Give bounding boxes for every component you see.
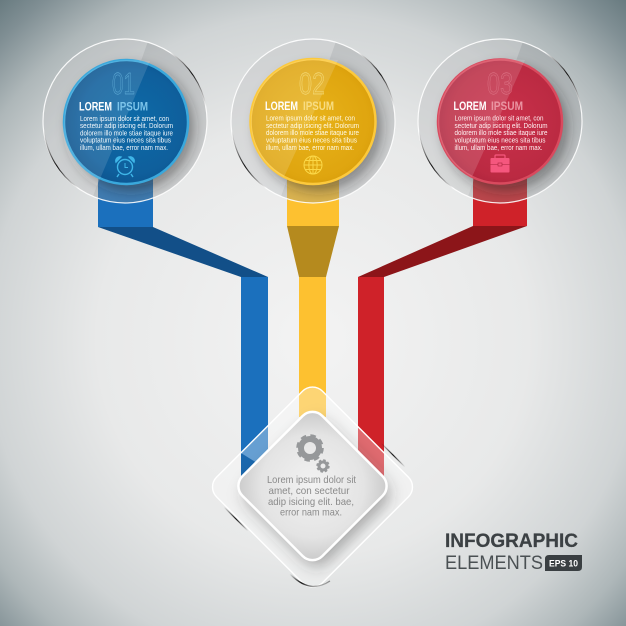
- panel: red circle: IPSUM: [491, 101, 523, 113]
- body text: dolorem illo mole stiae itaque iure: [454, 130, 548, 137]
- panel: blue circle: IPSUM: [117, 102, 148, 114]
- body text: dolorem illo mole stiae itaque iure: [266, 130, 359, 137]
- body text: sectetur adip isicing elit. Dolorum: [266, 123, 359, 130]
- body text: sectetur adip isicing elit. Dolorum: [454, 123, 548, 130]
- disc: [64, 60, 188, 184]
- panel: glass diamond: [207, 381, 418, 593]
- disc: [438, 60, 562, 184]
- diamond text: adip isicing elit. bae,: [268, 496, 354, 508]
- body text: voluptatum eius neces sita tibus: [454, 138, 546, 145]
- yellow connector ribbon: [287, 170, 339, 417]
- icon: alarm clock: [116, 157, 134, 177]
- body text: [454, 116, 548, 152]
- glass ring: [418, 38, 583, 204]
- body text: sectetur adip isicing elit. Dolorum: [80, 123, 173, 130]
- body text: [80, 116, 173, 152]
- disc: [250, 59, 376, 184]
- glass ring: [230, 38, 396, 204]
- icon: globe: [304, 156, 322, 174]
- dark ribbon reflection: [241, 453, 257, 478]
- number: 03: [487, 66, 513, 101]
- panel: blue circle: [42, 38, 208, 204]
- title block: [445, 530, 582, 574]
- body text: voluptatum eius neces sita tibus: [266, 138, 357, 145]
- body text: illum, ullam bae, error nam max.: [80, 145, 168, 152]
- icon: briefcase: [490, 155, 510, 172]
- body text: Lorem ipsum dolor sit amet, con: [266, 116, 355, 123]
- badge: EPS 10: [549, 558, 578, 568]
- icon: small gear: [317, 460, 329, 472]
- panel: yellow circle: [230, 38, 396, 204]
- heading: LOREM: [79, 102, 112, 114]
- body text: Lorem ipsum dolor sit amet, con: [454, 116, 544, 123]
- body text: [266, 116, 359, 152]
- panel: yellow circle: IPSUM: [303, 101, 334, 113]
- heading: LOREM: [265, 101, 298, 113]
- body text: illum, ullam bae, error nam max.: [454, 145, 543, 152]
- diamond text: [267, 474, 356, 518]
- diamond text: amet, con sectetur: [268, 485, 350, 497]
- diamond text: Lorem ipsum dolor sit: [267, 474, 356, 486]
- heading: LOREM: [454, 101, 486, 113]
- number: 01: [112, 66, 135, 101]
- body text: Lorem ipsum dolor sit amet, con: [80, 116, 169, 123]
- number: 02: [299, 66, 325, 101]
- glass ring: [42, 38, 208, 204]
- icon: large gear: [298, 436, 322, 460]
- title block: ELEMENTS: [445, 553, 543, 574]
- body text: voluptatum eius neces sita tibus: [80, 138, 171, 145]
- outer glass diamond: [207, 381, 418, 593]
- title block: INFOGRAPHIC: [445, 530, 578, 552]
- body text: dolorem illo mole stiae itaque iure: [80, 130, 173, 137]
- blue connector ribbon: [98, 170, 268, 478]
- diamond text: error nam max.: [280, 506, 342, 518]
- body text: illum, ullam bae, error nam max.: [266, 145, 354, 152]
- diamond shadow: [239, 416, 395, 572]
- inner diamond: [233, 406, 392, 566]
- panel: red circle: [418, 38, 583, 204]
- outer outline: [207, 381, 418, 593]
- red connector ribbon: [358, 170, 527, 478]
